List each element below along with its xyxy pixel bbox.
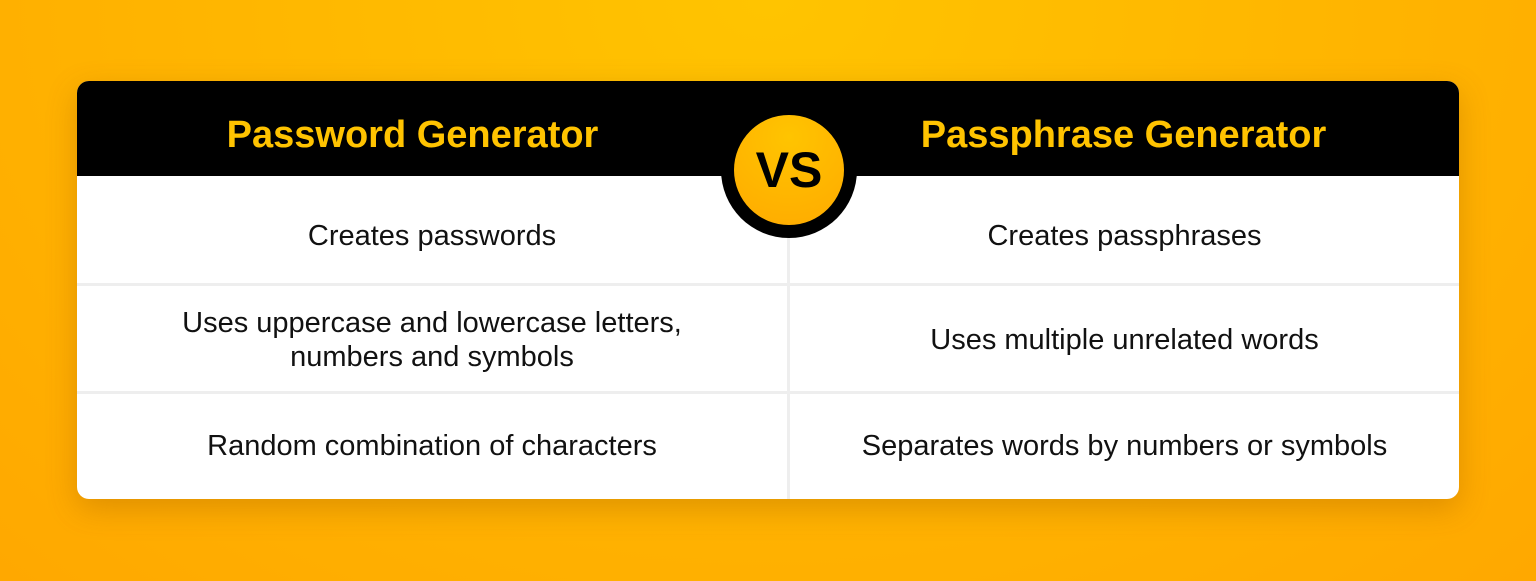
row 2 right: Uses multiple unrelated words [930, 324, 1319, 356]
row 2 left [182, 307, 682, 372]
row 1 right: Creates passphrases [987, 220, 1262, 252]
comparison card [77, 81, 1459, 499]
row 3 right: Separates words by numbers or symbols [862, 430, 1387, 462]
heading: passphrase generator: Passphrase Generator [921, 114, 1326, 156]
VS badge [721, 102, 857, 238]
row 1 left: Creates passwords [308, 220, 556, 252]
heading: password generator: Password Generator [227, 114, 598, 156]
VS badge: VS [756, 142, 822, 198]
row 2 left: Uses uppercase and lowercase letters, [182, 307, 682, 339]
header bar [77, 81, 1459, 176]
row 2 left: numbers and symbols [290, 340, 574, 372]
row 3 left: Random combination of characters [207, 430, 657, 462]
